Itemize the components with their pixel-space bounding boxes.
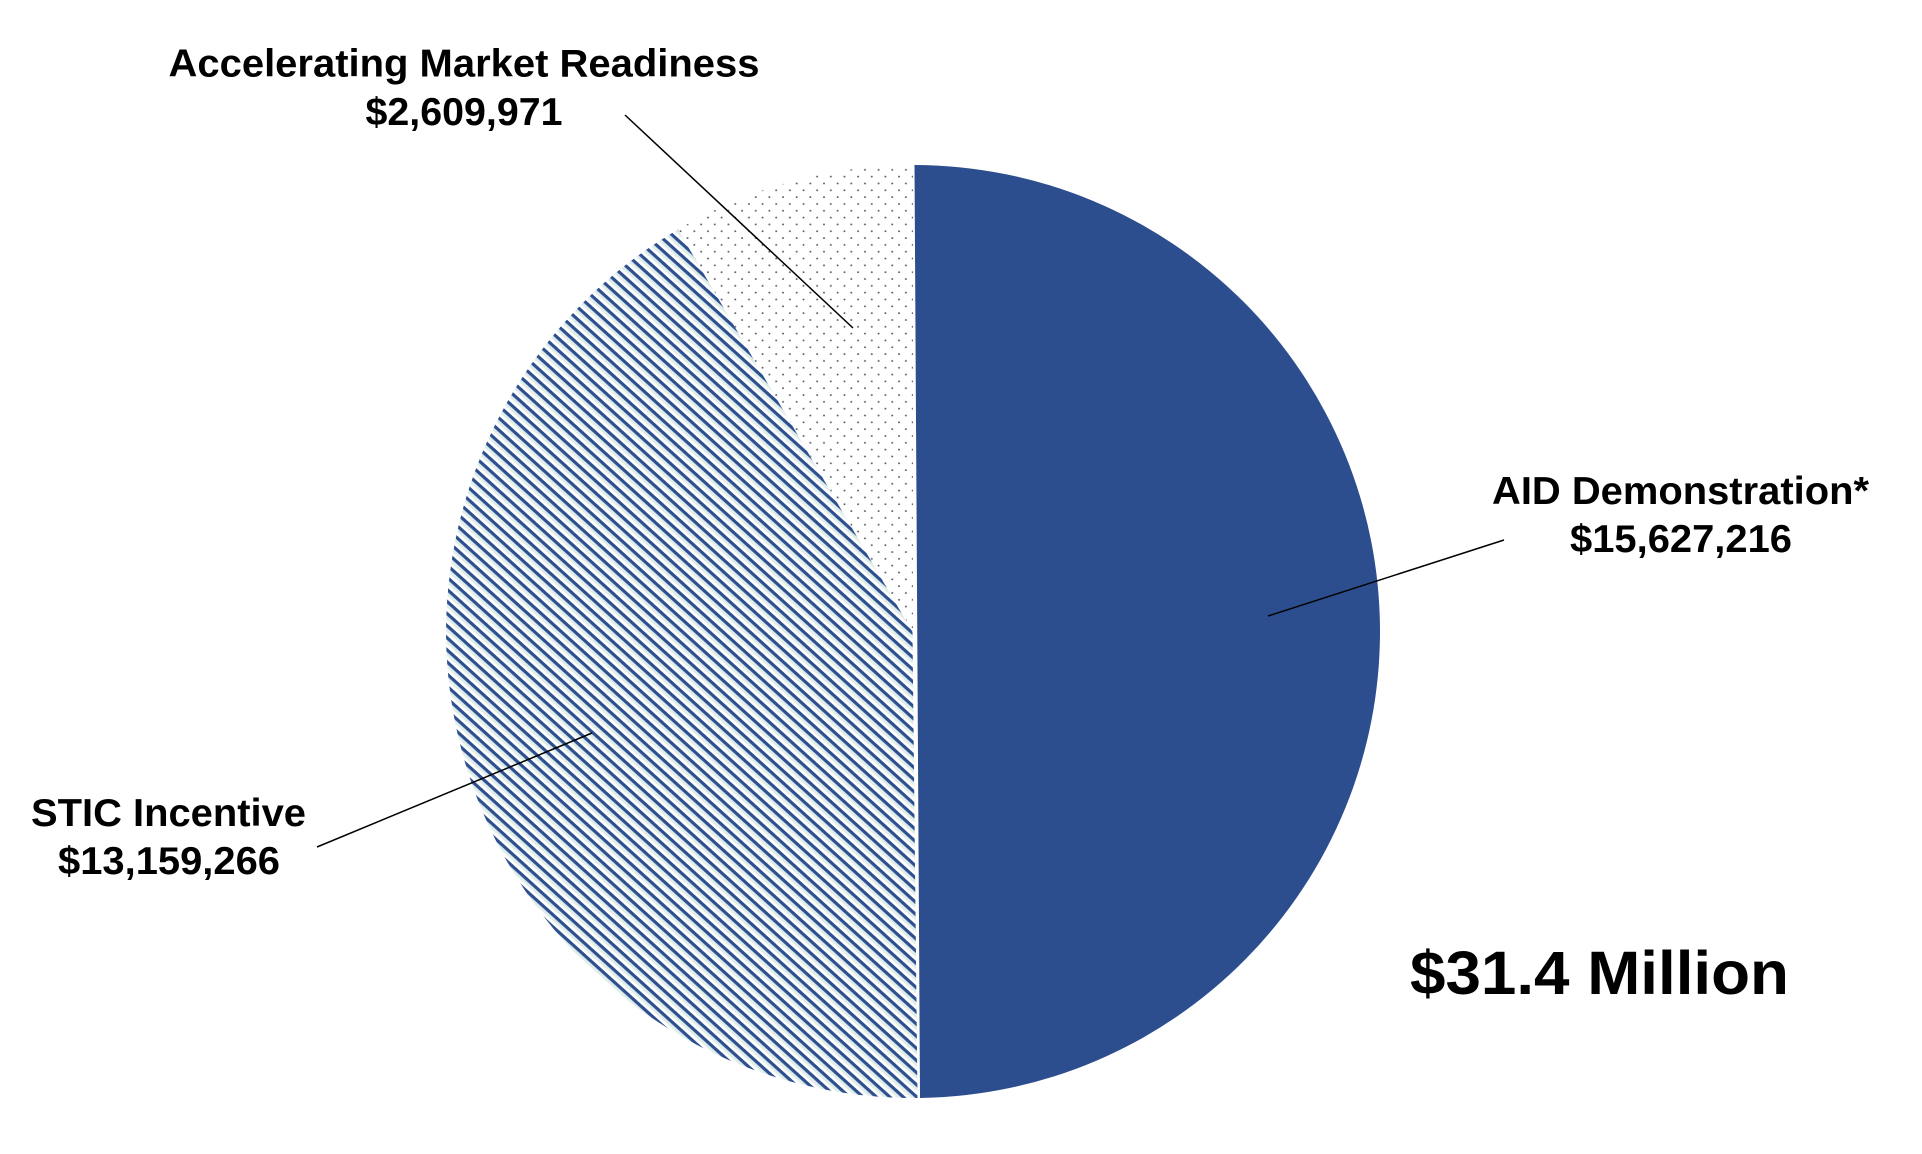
total amount: $31.4 Million <box>1410 939 1789 1007</box>
label: Accelerating Market Readiness <box>168 42 760 134</box>
slice: Accelerating Market Readiness <box>678 165 913 632</box>
leader line: Accelerating Market Readiness <box>625 115 853 328</box>
leader line: STIC Incentive <box>317 733 592 847</box>
label: Accelerating Market Readiness: $2,609,971 <box>366 91 562 134</box>
label: AID Demonstration: $15,627,216 <box>1570 518 1792 561</box>
slice: AID Demonstration <box>914 165 1380 1098</box>
slice: STIC Incentive <box>446 230 918 1098</box>
label: STIC Incentive: $13,159,266 <box>58 840 280 883</box>
label: STIC Incentive <box>31 792 306 883</box>
label: AID Demonstration: AID Demonstration* <box>1492 470 1870 513</box>
pie chart <box>446 165 1380 1098</box>
leader line: AID Demonstration <box>1268 540 1504 616</box>
label: STIC Incentive: STIC Incentive <box>31 792 306 835</box>
label: AID Demonstration <box>1492 470 1870 561</box>
label: Accelerating Market Readiness: Accelerating Market Readiness <box>168 42 760 86</box>
